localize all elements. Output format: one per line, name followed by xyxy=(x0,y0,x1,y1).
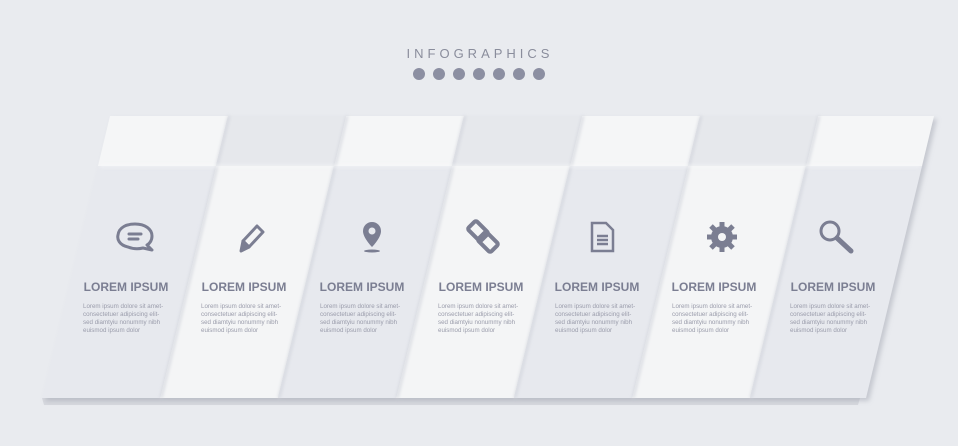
descriptions: consectetuer adipiscing elit- xyxy=(672,311,748,318)
descriptions: euismod ipsum dolor xyxy=(201,327,258,334)
icon: chain link xyxy=(467,220,499,253)
panel 7 xyxy=(750,116,934,398)
descriptions: sed diamtyiu nonummy nibh xyxy=(83,319,161,326)
descriptions: consectetuer adipiscing elit- xyxy=(438,311,514,318)
descriptions: sed diamtyiu nonummy nibh xyxy=(555,319,633,326)
descriptions: sed diamtyiu nonummy nibh xyxy=(320,319,398,326)
descriptions: sed diamtyiu nonummy nibh xyxy=(201,319,279,326)
labels: LOREM IPSUM xyxy=(555,280,639,294)
icon: magnifier xyxy=(821,222,851,251)
labels: LOREM IPSUM xyxy=(439,280,523,294)
panel 4 xyxy=(396,116,582,398)
descriptions: euismod ipsum dolor xyxy=(320,327,377,334)
labels xyxy=(84,280,875,294)
labels: LOREM IPSUM xyxy=(791,280,875,294)
descriptions: euismod ipsum dolor xyxy=(83,327,140,334)
panels xyxy=(42,116,934,398)
descriptions: euismod ipsum dolor xyxy=(438,327,495,334)
panel 2 xyxy=(160,116,346,398)
descriptions: consectetuer adipiscing elit- xyxy=(320,311,396,318)
descriptions: consectetuer adipiscing elit- xyxy=(201,311,277,318)
descriptions: euismod ipsum dolor xyxy=(555,327,612,334)
descriptions: sed diamtyiu nonummy nibh xyxy=(790,319,868,326)
descriptions xyxy=(83,303,870,334)
descriptions: Lorem ipsum dolore sit amet- xyxy=(438,303,518,310)
descriptions: euismod ipsum dolor xyxy=(790,327,847,334)
icon: speech bubble xyxy=(118,224,152,250)
icon: gear xyxy=(707,222,737,252)
base shadow strip xyxy=(42,398,860,405)
icon: document xyxy=(592,223,613,251)
descriptions: Lorem ipsum dolore sit amet- xyxy=(201,303,281,310)
descriptions: consectetuer adipiscing elit- xyxy=(83,311,159,318)
dots xyxy=(413,68,545,80)
descriptions: Lorem ipsum dolore sit amet- xyxy=(83,303,163,310)
icon: location pin xyxy=(363,222,381,252)
labels: LOREM IPSUM xyxy=(320,280,404,294)
descriptions: Lorem ipsum dolore sit amet- xyxy=(320,303,400,310)
descriptions: Lorem ipsum dolore sit amet- xyxy=(555,303,635,310)
panel 1 xyxy=(42,116,228,398)
descriptions: sed diamtyiu nonummy nibh xyxy=(672,319,750,326)
panel 3 xyxy=(278,116,464,398)
labels: LOREM IPSUM xyxy=(84,280,168,294)
labels: LOREM IPSUM xyxy=(672,280,756,294)
descriptions: sed diamtyiu nonummy nibh xyxy=(438,319,516,326)
descriptions: consectetuer adipiscing elit- xyxy=(790,311,866,318)
descriptions: euismod ipsum dolor xyxy=(672,327,729,334)
panel 5 xyxy=(514,116,700,398)
descriptions: Lorem ipsum dolore sit amet- xyxy=(672,303,752,310)
panel 6 xyxy=(632,116,818,398)
icon: pencil xyxy=(241,226,263,251)
descriptions: consectetuer adipiscing elit- xyxy=(555,311,631,318)
descriptions: Lorem ipsum dolore sit amet- xyxy=(790,303,870,310)
title: INFOGRAPHICS xyxy=(407,46,553,61)
labels: LOREM IPSUM xyxy=(202,280,286,294)
